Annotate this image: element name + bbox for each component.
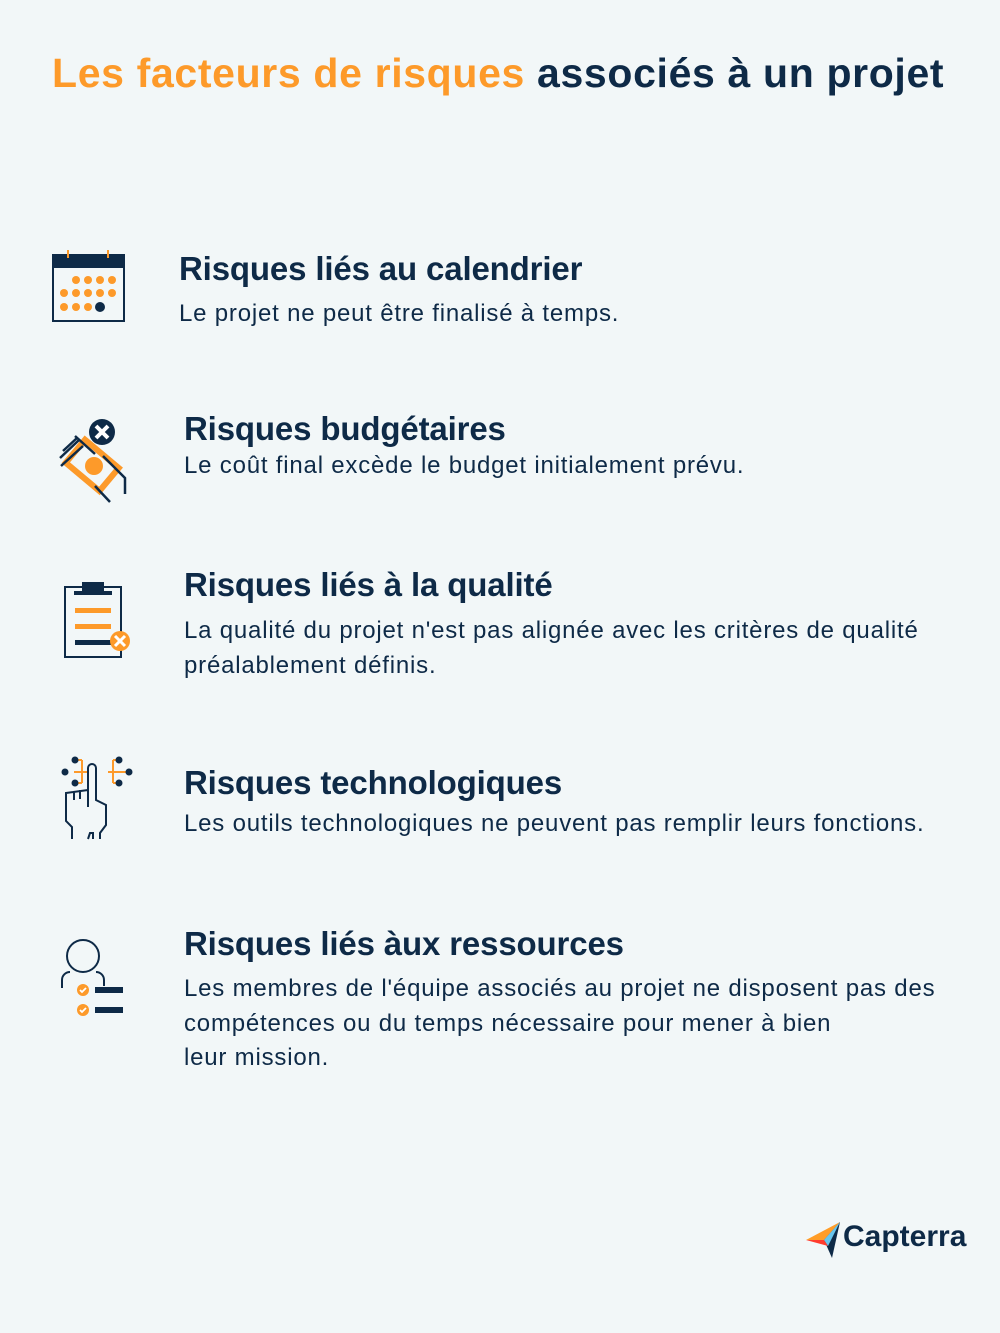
text: ressources (184, 975, 935, 1071)
heading: ressources: Risques liés àux ressources (184, 925, 624, 962)
icon: calendar (52, 250, 125, 322)
text: ressources: leur mission. (184, 1044, 329, 1071)
heading: qualité: Risques liés à la qualité (184, 566, 553, 603)
text: calendrier: Le projet ne peut être finalisé à temps. (179, 300, 619, 327)
text: technologiques: Les outils technologiques ne peuvent pas remplir leurs fonctions. (184, 810, 924, 837)
icon: budget hand (59, 419, 126, 503)
text: qualité: préalablement définis. (184, 652, 436, 678)
logo: Capterra (806, 1220, 967, 1258)
title: Les facteurs de risques associés à un projet (52, 50, 944, 96)
heading: budget: Risques budgétaires (184, 410, 506, 447)
icon: person with checklist (61, 939, 123, 1016)
text: ressources: compétences ou du temps nécessaire pour mener à bien (184, 1010, 831, 1036)
text: budget: Le coût final excède le budget initialement prévu. (184, 452, 744, 479)
text: qualité: La qualité du projet n'est pas alignée avec les critères de qualité (184, 617, 919, 644)
text: qualité (184, 617, 919, 678)
heading: technologiques: Risques technologiques (184, 764, 562, 801)
icon: tech hand (62, 756, 132, 840)
heading: calendrier: Risques liés au calendrier (179, 250, 582, 287)
icon: clipboard (64, 582, 130, 658)
text: ressources: Les membres de l'équipe associés au projet ne disposent pas des (184, 975, 935, 1002)
logo: Capterra: Capterra (843, 1220, 966, 1253)
